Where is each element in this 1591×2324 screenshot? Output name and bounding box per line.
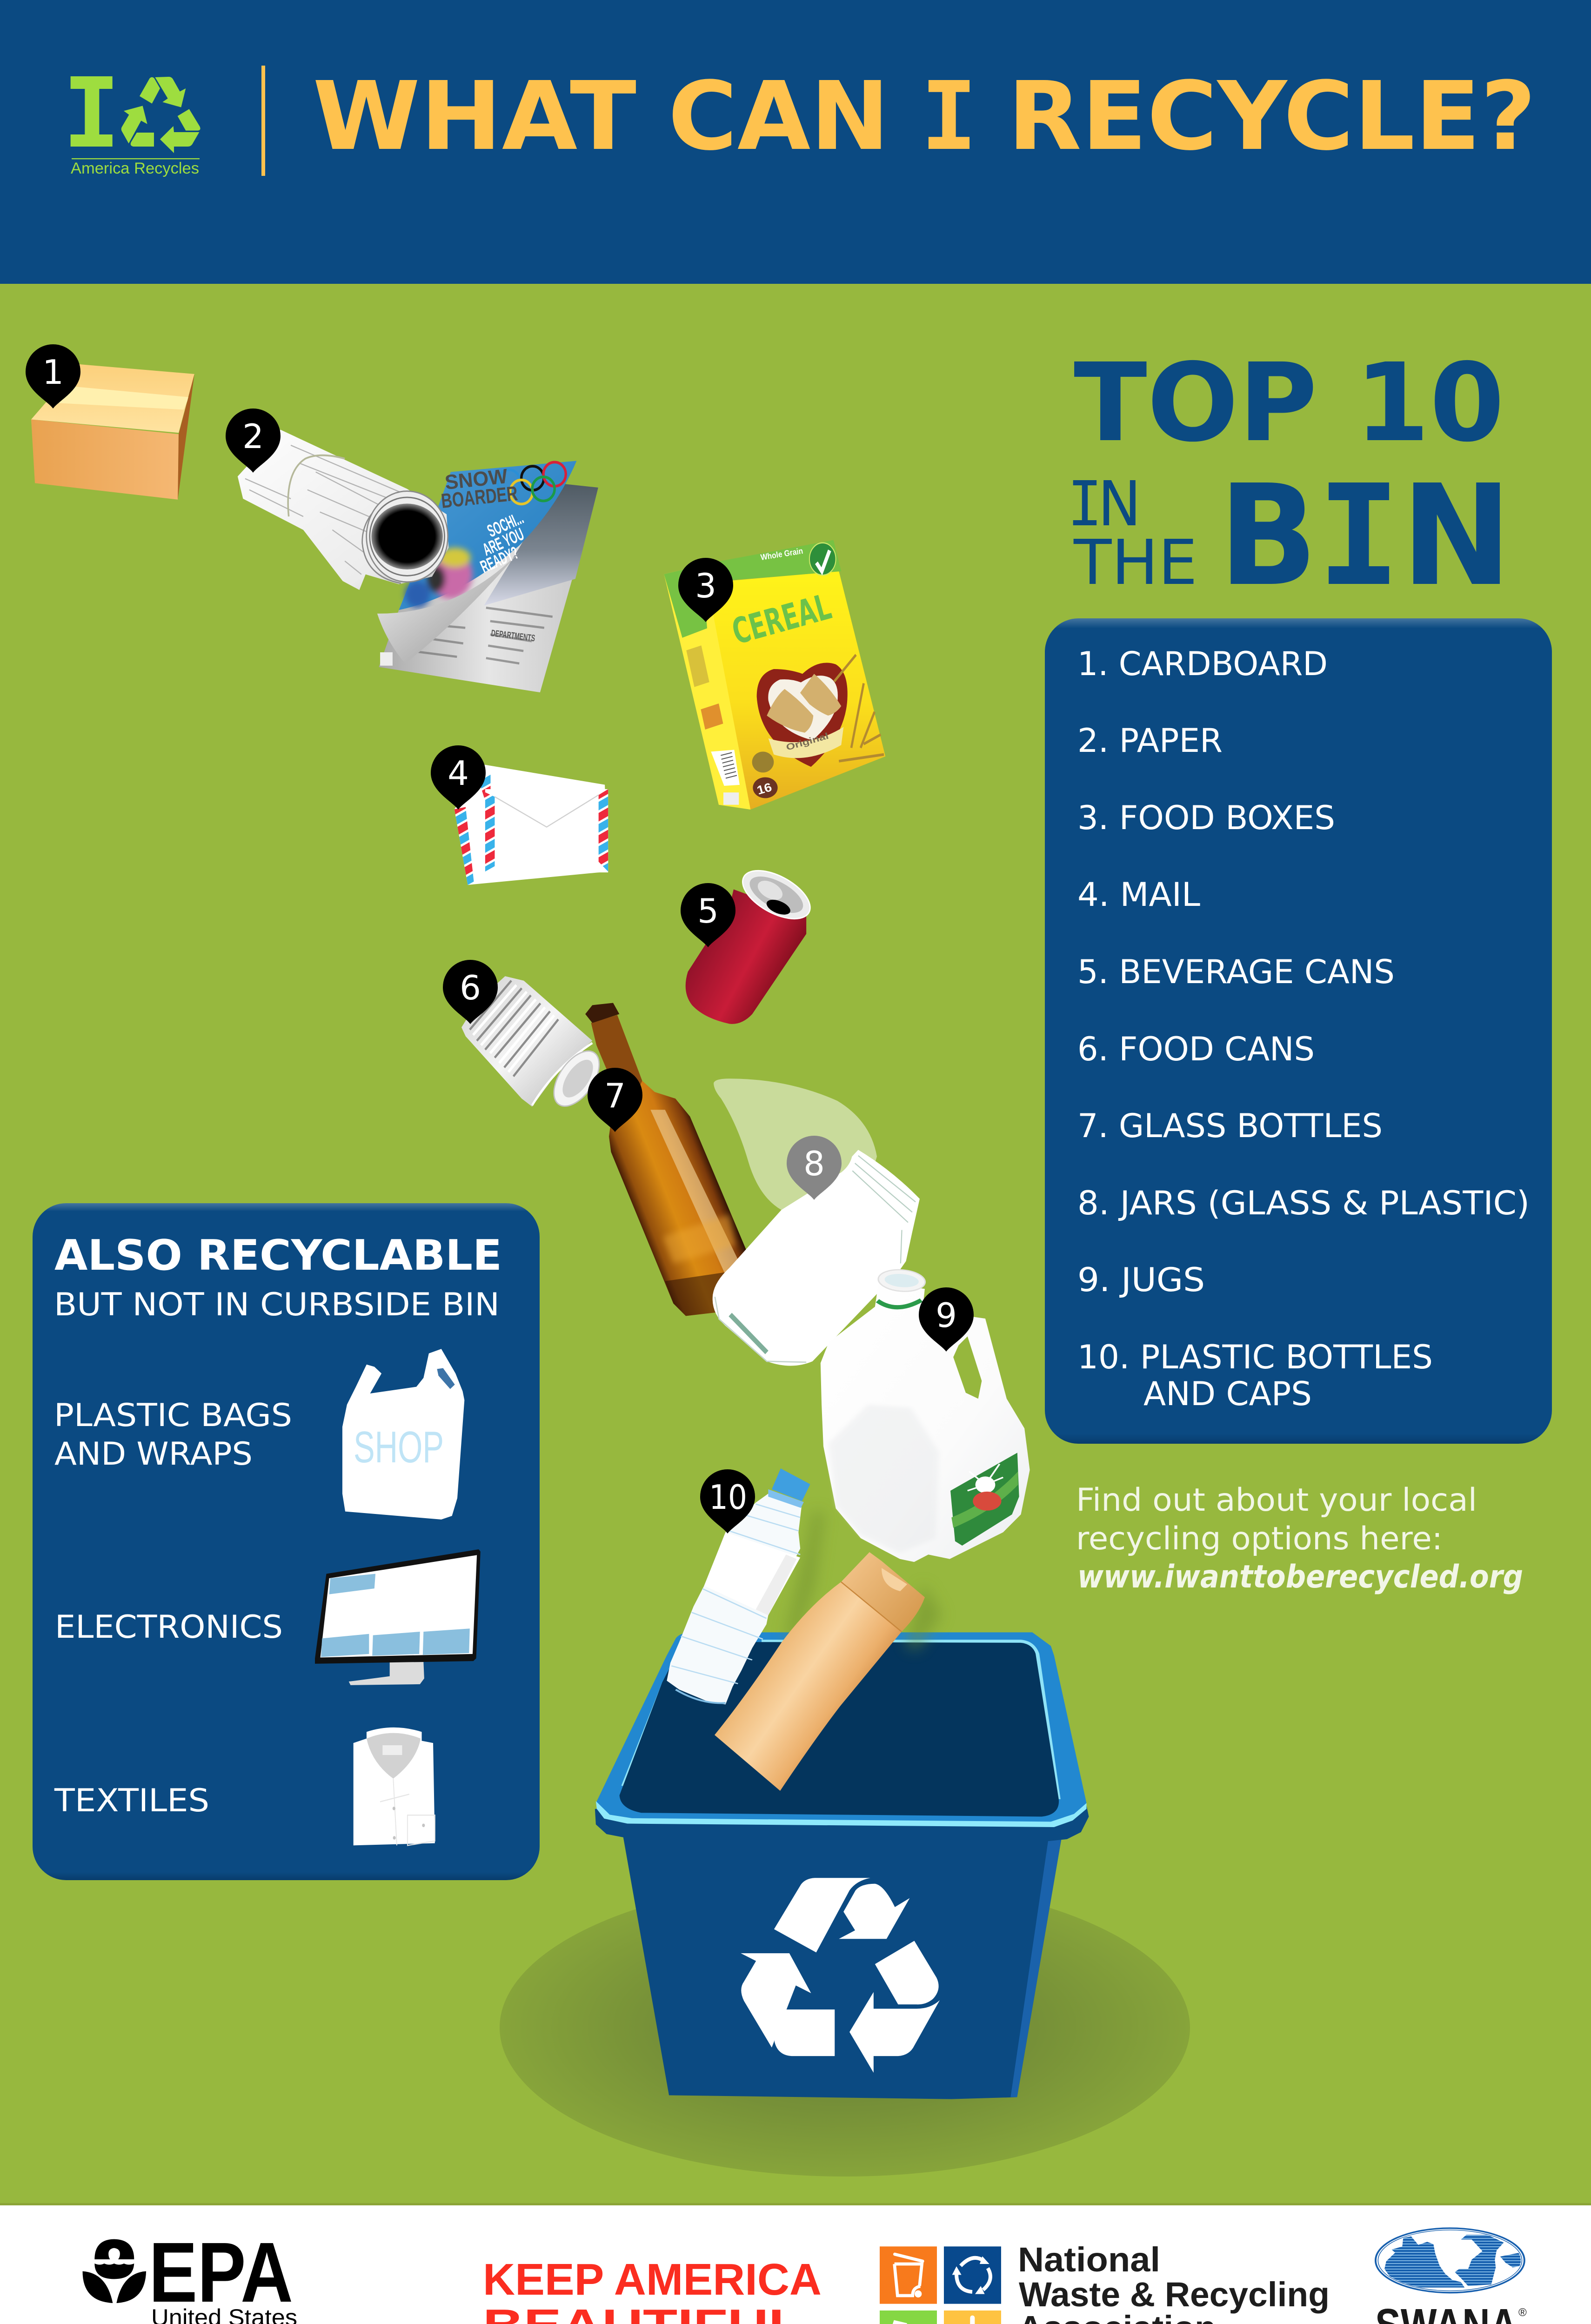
pin 4: 4 xyxy=(448,754,469,793)
pin 3: 3 xyxy=(695,566,716,605)
list items: 4. MAIL xyxy=(1077,876,1200,914)
logo: SWANA xyxy=(1375,2228,1527,2324)
title xyxy=(313,61,1536,171)
label: plastic bags: AND WRAPS xyxy=(54,1436,253,1473)
heading: top 10 in the bin: TOP 10 xyxy=(1074,340,1504,466)
pin 6 xyxy=(443,960,498,1024)
magazine cover text: SNOW xyxy=(444,465,509,494)
label: textiles: TEXTILES xyxy=(54,1782,209,1819)
pin 1 xyxy=(26,344,80,409)
logo: National Waste & Recycling Association: Waste & Recycling xyxy=(1019,2275,1330,2314)
icon: recycling bin back xyxy=(595,1632,1089,2099)
bin rim xyxy=(596,1632,1087,1824)
label: plastic bags: PLASTIC BAGS xyxy=(54,1397,292,1434)
pin 9 xyxy=(919,1287,974,1352)
logo: Keep America Beautiful: KEEP AMERICA xyxy=(483,2255,822,2304)
pin 4 xyxy=(431,745,486,810)
panel: top 10 list xyxy=(1045,618,1552,1444)
magazine cover xyxy=(399,461,576,610)
heading: top 10 in the bin: I xyxy=(1317,455,1401,617)
heading: top 10 in the bin: N xyxy=(1098,469,1141,540)
magazine cover text: DEPARTMENTS xyxy=(490,628,535,644)
icon: folded shirt xyxy=(354,1728,435,1845)
header divider xyxy=(261,66,265,176)
magazine cover text: ARE YOU xyxy=(480,524,527,560)
title: I xyxy=(921,61,977,171)
pin 2 xyxy=(226,409,281,473)
list items xyxy=(1077,645,1530,1413)
bin opening xyxy=(620,1642,1059,1817)
pin 5 xyxy=(681,883,735,947)
logo: SWANA: ® xyxy=(1518,2306,1527,2319)
pin 3 xyxy=(678,558,733,622)
panel: also recyclable xyxy=(33,1203,540,1880)
cereal box text: CEREAL xyxy=(728,586,836,652)
label: plastic bags xyxy=(54,1397,292,1473)
icon: plastic bag: SHOP xyxy=(354,1422,444,1472)
page curl xyxy=(377,552,519,663)
text block: find local options: www.iwanttoberecycled.org xyxy=(1077,1559,1523,1595)
title: CAN xyxy=(668,61,889,171)
list items: 10. PLASTIC BOTTLES xyxy=(1077,1338,1433,1376)
logo: I Recycle America Recycles: America Recycles xyxy=(71,160,199,177)
recycling symbol xyxy=(741,1878,940,2073)
footer band xyxy=(0,2205,1591,2324)
label: electronics: ELECTRONICS xyxy=(55,1609,283,1646)
text block: find local options: recycling options here: xyxy=(1076,1520,1443,1557)
list items: 2. PAPER xyxy=(1077,722,1223,760)
list items: 7. GLASS BOTTLES xyxy=(1077,1107,1383,1145)
pin 1: 1 xyxy=(42,353,64,392)
logo: National Waste & Recycling Association xyxy=(880,2240,1330,2324)
icon: envelopes xyxy=(455,765,608,885)
icon: plastic bottle xyxy=(667,1468,810,1704)
cereal box text: Whole Grain xyxy=(760,546,803,562)
header band xyxy=(0,0,1591,284)
newspaper roll xyxy=(238,430,448,590)
magazine page xyxy=(379,476,598,692)
icon: computer monitor xyxy=(315,1549,481,1685)
shadow behind bottles xyxy=(791,1512,935,1647)
logo: EPA xyxy=(82,2224,297,2324)
cereal box text: Original xyxy=(785,731,830,753)
icon: glass bottle xyxy=(585,1003,748,1316)
bin body xyxy=(623,1834,1062,2099)
icon: newspaper and magazine xyxy=(238,430,598,692)
logo: EPA: EPA xyxy=(149,2224,293,2320)
pin 9: 9 xyxy=(936,1296,957,1335)
heading: top 10 in the bin: B xyxy=(1219,455,1317,617)
bin shadow xyxy=(500,1879,1190,2177)
pin 10: 10 xyxy=(709,1478,747,1517)
pin 8: 8 xyxy=(803,1144,825,1183)
list items: 1. CARDBOARD xyxy=(1077,645,1328,683)
list items: 9. JUGS xyxy=(1077,1261,1205,1299)
list items: 5. BEVERAGE CANS xyxy=(1077,953,1395,991)
icon: jar with leaf highlight xyxy=(713,1078,920,1366)
list items: AND CAPS xyxy=(1143,1375,1312,1413)
cereal box text xyxy=(728,546,836,797)
pin 7: 7 xyxy=(604,1076,626,1115)
text block: find local options xyxy=(1076,1482,1523,1595)
title: RECYCLE? xyxy=(1008,61,1536,171)
title: WHAT xyxy=(313,61,636,171)
pin 6: 6 xyxy=(460,968,481,1007)
icon: milk jug xyxy=(821,1268,1030,1562)
pin 5: 5 xyxy=(697,891,719,931)
icon: soda can xyxy=(686,861,817,1024)
icon: plastic bag xyxy=(342,1349,464,1520)
heading: top 10 in the bin xyxy=(1067,340,1512,617)
logo: I Recycle America Recycles xyxy=(71,76,201,177)
pin 8 xyxy=(787,1136,842,1200)
heading: top 10 in the bin: N xyxy=(1401,455,1512,617)
cereal box text: 16 xyxy=(755,780,773,797)
pin 10 xyxy=(700,1469,755,1534)
logo: National Waste & Recycling Association: National xyxy=(1018,2240,1160,2279)
magazine cover text xyxy=(440,465,535,644)
heading: top 10 in the bin: THE xyxy=(1073,527,1197,599)
list items: 3. FOOD BOXES xyxy=(1077,799,1335,837)
text block: find local options: Find out about your local xyxy=(1076,1482,1477,1519)
pin 2: 2 xyxy=(242,417,264,456)
icon: shampoo bottle xyxy=(715,1552,925,1791)
pin 7 xyxy=(588,1068,642,1132)
magazine cover text: READY? xyxy=(478,543,521,577)
magazine cover text: SOCHI... xyxy=(485,508,527,541)
magazine cover text: BOARDER xyxy=(440,482,519,513)
list items: 8. JARS (GLASS & PLASTIC) xyxy=(1077,1184,1530,1222)
heading: top 10 in the bin: I xyxy=(1067,469,1103,540)
list items: 6. FOOD CANS xyxy=(1077,1030,1315,1068)
icon: cereal box xyxy=(664,540,885,810)
subheading: BUT NOT IN CURBSIDE BIN xyxy=(54,1286,500,1323)
icon: food can xyxy=(461,976,608,1115)
heading: also recyclable: ALSO RECYCLABLE xyxy=(54,1231,502,1280)
icon: cardboard box xyxy=(31,364,194,500)
